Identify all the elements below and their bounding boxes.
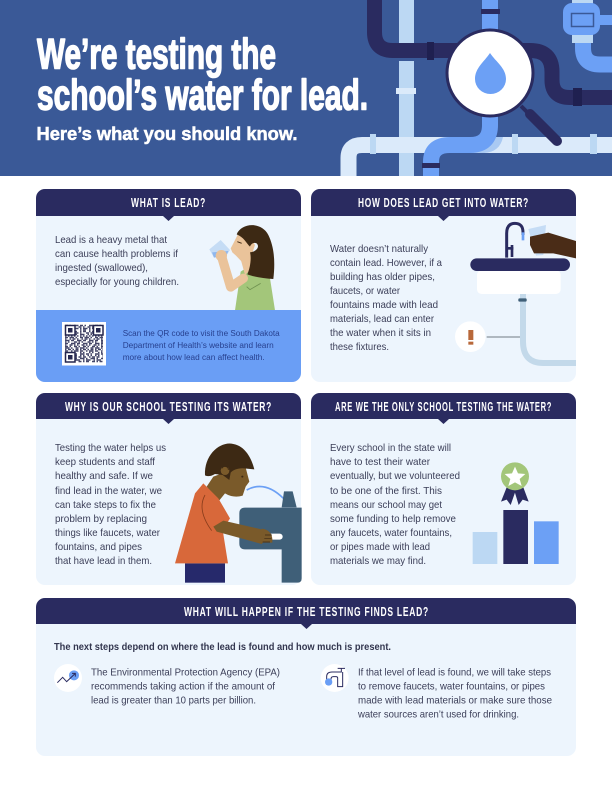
title: We’re testing the [37, 30, 276, 78]
body text [330, 244, 442, 353]
body text: means our school may get [330, 500, 442, 511]
body text: healthy and safe. If we [55, 471, 153, 482]
icon: faucet [321, 664, 349, 692]
body text: the water when it sits in [330, 328, 431, 339]
panel: how does lead get into water [311, 189, 576, 382]
body text: Lead is a heavy metal that [55, 235, 167, 246]
next steps text: made with lead materials or make sure those [358, 696, 552, 706]
panel: are we the only school testing the water [311, 393, 576, 585]
water meter [563, 0, 612, 43]
body text: can cause health problems if [55, 249, 178, 260]
body text: any faucets, water fountains, [330, 528, 452, 539]
body text: some funding to help remove [330, 514, 456, 525]
header banner [0, 0, 612, 176]
body text: materials, lead can enter [330, 314, 435, 325]
body text: faucets, or water [330, 286, 401, 297]
header bar [36, 393, 301, 424]
header bar: WHAT IS LEAD? [131, 196, 206, 210]
body text: can take steps to fix the [55, 500, 156, 511]
body text [330, 443, 460, 567]
header bar [311, 189, 576, 221]
pipe network illustration [348, 0, 612, 176]
illustration: bar chart with award ribbon [473, 462, 559, 564]
illustration: girl drinking water [209, 225, 275, 310]
body text: Testing the water helps us [55, 443, 166, 454]
body text: fountains, and pipes [55, 542, 142, 553]
QR text: Department of Health’s website and learn [123, 340, 274, 350]
body text: especially for young children. [55, 277, 179, 288]
header bar [36, 598, 576, 629]
body text: to be one of the first. This [330, 486, 442, 497]
EPA text: The Environmental Protection Agency (EPA) [91, 668, 280, 678]
header bar: HOW DOES LEAD GET INTO WATER? [358, 196, 529, 210]
body text: find lead in the water, we [55, 486, 162, 497]
QR callout [36, 310, 301, 382]
body text: ingested (swallowed), [55, 263, 148, 274]
body text: that have lead in them. [55, 556, 152, 567]
header bar [36, 189, 301, 221]
body text [55, 235, 179, 288]
illustration: boy at water fountain [175, 443, 302, 583]
body text: building has older pipes, [330, 272, 435, 283]
body text: or pipes made with lead [330, 542, 430, 553]
body text: keep students and staff [55, 457, 155, 468]
body text: contain lead. However, if a [330, 258, 442, 269]
body text: things like faucets, water [55, 528, 161, 539]
body text: have to test their water [330, 457, 431, 468]
body text: Every school in the state will [330, 443, 451, 454]
body text: eventually, but we volunteered [330, 471, 460, 482]
next steps text: water sources aren’t used for drinking. [357, 710, 519, 720]
body text: problem by replacing [55, 514, 147, 525]
EPA text: recommends taking action if the amount of [91, 682, 275, 692]
warning mark [468, 330, 473, 345]
title: school’s water for lead. [37, 72, 368, 120]
next steps text: to remove faucets, water fountains, or pipes [358, 682, 545, 692]
intro sentence: The next steps depend on where the lead is found and how much is present. [54, 642, 391, 653]
header bar [311, 393, 576, 424]
next steps text [357, 668, 552, 720]
panel: what is lead [36, 189, 301, 382]
header bar: WHAT WILL HAPPEN IF THE TESTING FINDS LEAD? [184, 605, 429, 619]
EPA text: lead is greater than 10 parts per billion. [91, 696, 256, 706]
subtitle: Here’s what you should know. [36, 124, 298, 144]
icon: rising trend line [54, 664, 82, 692]
QR text: more about how lead can affect health. [123, 352, 265, 362]
body text: fountains made with lead [330, 300, 438, 311]
body text: Water doesn’t naturally [330, 244, 429, 255]
illustration: sink and pipe with warning [455, 223, 576, 363]
title [37, 30, 368, 120]
EPA text [91, 668, 280, 706]
panel: what will happen if the testing finds lead [36, 598, 576, 756]
body text: these fixtures. [330, 342, 389, 353]
panel: why is our school testing its water [36, 393, 302, 585]
next steps text: If that level of lead is found, we will take steps [358, 668, 551, 678]
QR text [123, 328, 280, 362]
QR text: Scan the QR code to visit the South Dakota [123, 328, 280, 338]
body text [55, 443, 166, 567]
QR code [62, 322, 106, 366]
icon: magnifying glass with water drop [447, 30, 557, 141]
body text: materials we may find. [330, 556, 426, 567]
header bar: WHY IS OUR SCHOOL TESTING ITS WATER? [65, 400, 272, 414]
